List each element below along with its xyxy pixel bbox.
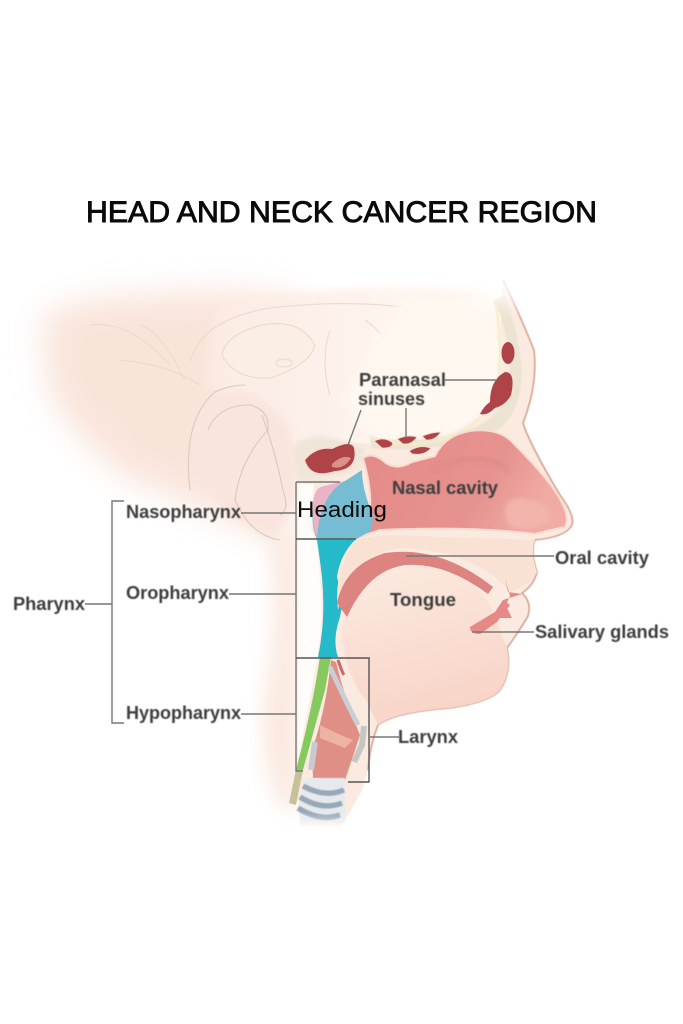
chin and jaw tissue — [342, 560, 508, 725]
brain contour lines — [90, 304, 470, 540]
oropharynx — [317, 540, 355, 657]
trachea rings — [298, 778, 345, 822]
label: paranasal: Paranasal — [359, 370, 446, 390]
larynx — [311, 660, 364, 780]
skull interior over face — [340, 292, 500, 440]
lower fade — [270, 812, 360, 838]
nasopharynx — [312, 470, 373, 540]
label: salivary glands: Salivary glands — [535, 622, 669, 642]
sinuses — [304, 342, 514, 474]
label: pharynx: Pharynx — [13, 594, 85, 614]
label: nasopharynx: Nasopharynx — [126, 502, 241, 522]
label: sinuses: sinuses — [358, 389, 425, 409]
nasal cavity — [362, 430, 567, 536]
palate and tongue mucosa — [337, 535, 537, 634]
label: tongue: Tongue — [390, 590, 456, 610]
skull and brain area — [192, 287, 500, 540]
label: oral cavity: Oral cavity — [555, 548, 649, 568]
labels — [13, 370, 669, 747]
label: larynx: Larynx — [398, 727, 458, 747]
label: nasal cavity: Nasal cavity — [392, 478, 498, 498]
label: oropharynx: Oropharynx — [126, 583, 229, 603]
neck skin fade — [262, 530, 300, 815]
forehead fade — [470, 262, 545, 305]
pharynx bracket and guide lines — [85, 380, 554, 782]
label: hypopharynx: Hypopharynx — [126, 703, 241, 723]
forehead speckled bone — [370, 295, 522, 449]
white strip behind pharynx — [298, 484, 322, 760]
back of head skin tone — [42, 292, 300, 540]
face profile — [296, 280, 572, 826]
speckled bone behind sphenoid — [292, 436, 366, 480]
hypopharynx — [296, 657, 331, 770]
anatomical illustration — [42, 262, 572, 838]
heading placeholder: Heading — [297, 497, 387, 522]
title: HEAD AND NECK CANCER REGION — [86, 196, 597, 229]
